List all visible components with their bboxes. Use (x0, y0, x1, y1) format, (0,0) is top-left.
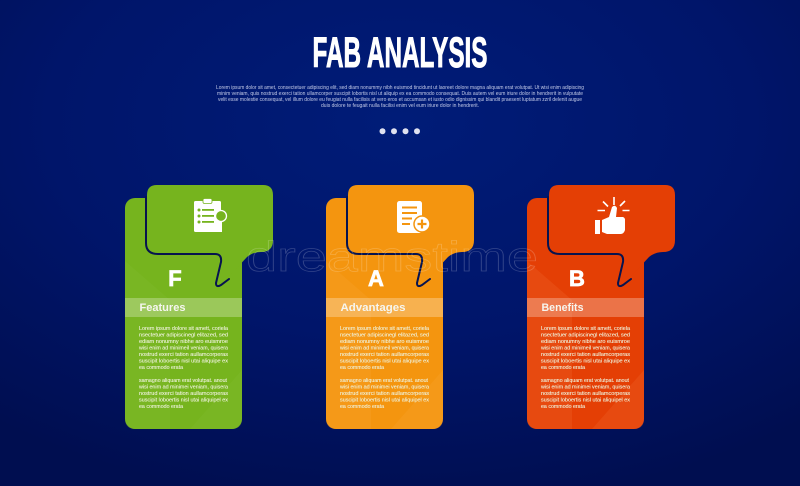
features card facets (125, 261, 242, 429)
panel: features (125, 185, 273, 429)
advantages card body (326, 198, 443, 429)
intro text block: duis dolore te feugait nulla facilisi enim vel eum iriure dolor in hendrerit. (321, 103, 479, 109)
benefits description: samagno aliquam erat volutpat. anout (541, 378, 629, 384)
benefits description: suscipit loboertis nisl utai aliquipel ex (541, 398, 630, 404)
advantages speech bubble (347, 185, 474, 286)
features description: Lorem ipsum dolore sit amett, coriela (139, 326, 229, 332)
features description: ediam nonumny nibhe aro euismroe (139, 339, 228, 345)
advantages description: nsectetuer adipiscinegl elitazed, sed (340, 332, 429, 338)
features description: samagno aliquam erat volutpat. anout (139, 378, 227, 384)
benefits letter: B (569, 266, 585, 291)
advantages label band (326, 298, 443, 317)
features description: ea commodo erata (139, 365, 184, 371)
advantages description: nostrud exerci tation aullamcorperas (340, 391, 429, 397)
intro text block: velit esse molestie consequat, vel illum dolore eu feugiat nulla facilisis at vero eros et accumsan et iusto odio dignissim qui blandit praesent luptatum zzril delenit augue (218, 97, 582, 103)
advantages description: ea commodo erata (340, 404, 385, 410)
features letter: F (168, 266, 182, 291)
advantages description (339, 326, 430, 410)
advantages description: ea commodo erata (340, 365, 385, 371)
features description: nostrud exerci tation aullamcorperas (139, 391, 228, 397)
features description (138, 326, 229, 410)
advantages description: samagno aliquam erat volutpat. anout (340, 378, 428, 384)
features description: suscipit loboertis nisl utai aliquipe ex (139, 358, 228, 364)
icon: document with plus (397, 201, 430, 233)
benefits card body (527, 198, 644, 429)
advantages description: wisi enim ad minimei veniam, quisera (339, 384, 430, 390)
icon: thumbs up with sparks (595, 197, 630, 234)
intro text block: minim veniam, quis nostrud exerci tation ullamcorper suscipit lobortis nisl ut aliquip ex ea commodo consequat. Duis autem vel eum iriure dolor in hendrerit in vulputate (217, 91, 583, 97)
features description: ea commodo erata (139, 404, 184, 410)
benefits speech bubble (548, 185, 675, 286)
features bubble outline (146, 197, 229, 286)
benefits description (540, 326, 631, 410)
benefits description: nostrud exerci tation aullamcorperas (541, 391, 630, 397)
advantages label: Advantages (340, 302, 406, 314)
panel: advantages (326, 185, 474, 429)
intro text block: Lorem ipsum dolor sit amet, consectetuer adipiscing elit, sed diam nonummy nibh euismod tincidunt ut laoreet dolore magna aliquam erat volutpat. Ut wisi enim adipiscing (216, 85, 584, 91)
advantages description: nostrud exerci tation aullamcorperas (340, 352, 429, 358)
benefits description: Lorem ipsum dolore sit amett, coriela (541, 326, 631, 332)
panel: benefits (527, 185, 675, 429)
intro text block (216, 85, 584, 109)
benefits card facets (527, 261, 644, 429)
benefits description: wisi enim ad minimei veniam, quisera (540, 384, 631, 390)
features description: nostrud exerci tation aullamcorperas (139, 352, 228, 358)
advantages bubble outline (347, 197, 430, 286)
watermark: dreamstime (246, 233, 538, 280)
features speech bubble (146, 185, 273, 286)
pagination dots (380, 128, 420, 134)
features description: nsectetuer adipiscinegl elitazed, sed (139, 332, 228, 338)
benefits description: wisi enim ad minimeil veniam, quisera (540, 346, 631, 352)
features card body (125, 198, 242, 429)
features label band (125, 298, 242, 317)
benefits description: ediam nonumny nibhe aro euismroe (541, 339, 630, 345)
benefits label: Benefits (542, 302, 584, 314)
title: FAB ANALYSIS (312, 29, 488, 77)
advantages letter: A (368, 266, 384, 291)
benefits description: nsectetuer adipiscinegl elitazed, sed (541, 332, 630, 338)
benefits label band (527, 298, 644, 317)
advantages description: suscipit loboertis nisl utai aliquipe ex (340, 358, 429, 364)
features label: Features (140, 302, 186, 314)
features description: suscipit loboertis nisl utai aliquipel ex (139, 398, 228, 404)
benefits description: ea commodo erata (541, 365, 586, 371)
features description: wisi enim ad minimei veniam, quisera (138, 384, 229, 390)
advantages description: suscipit loboertis nisl utai aliquipel ex (340, 398, 429, 404)
benefits description: ea commodo erata (541, 404, 586, 410)
icon: clipboard with magnifier (194, 198, 226, 232)
advantages card facets (326, 261, 443, 429)
advantages description: wisi enim ad minimeil veniam, quisera (339, 346, 430, 352)
benefits description: nostrud exerci tation aullamcorperas (541, 352, 630, 358)
features description: wisi enim ad minimeil veniam, quisera (138, 346, 229, 352)
advantages description: Lorem ipsum dolore sit amett, coriela (340, 326, 430, 332)
benefits bubble outline (548, 197, 631, 286)
advantages description: ediam nonumny nibhe aro euismroe (340, 339, 429, 345)
benefits description: suscipit loboertis nisl utai aliquipe ex (541, 358, 630, 364)
